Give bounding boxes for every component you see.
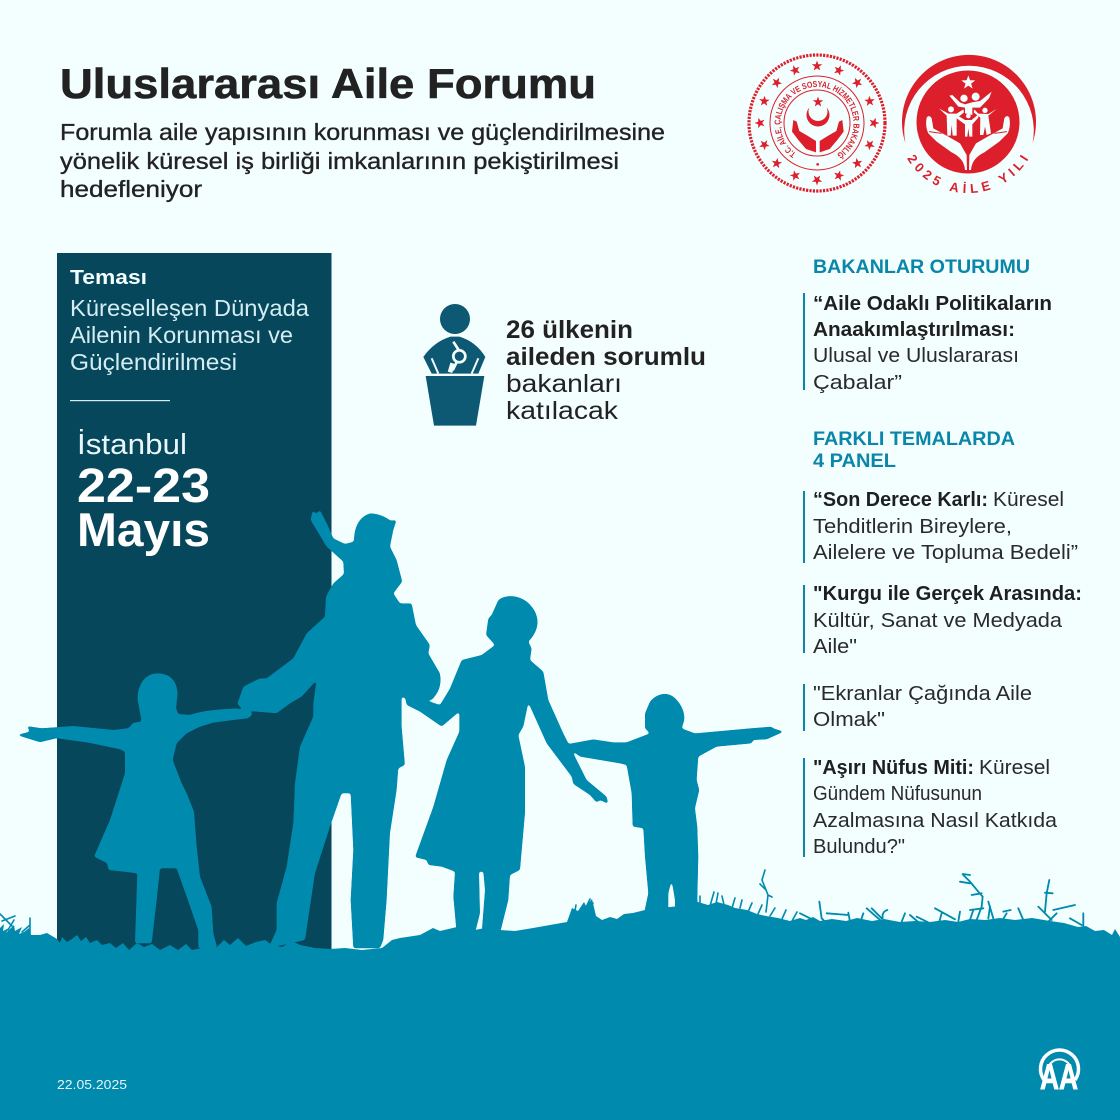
subtitle: Forumla aile yapısının korunması ve güçlendirilmesine bbox=[60, 119, 665, 145]
panel item 2: Aile" bbox=[813, 635, 857, 658]
panel item 1: Küresel bbox=[993, 488, 1064, 511]
panel item 4 bbox=[803, 756, 1058, 858]
callout: ministers attending bbox=[506, 316, 706, 425]
panel item 3: "Ekranlar Çağında Aile bbox=[813, 682, 1032, 705]
logo: 2025 family year: 2025 AİLE YILI bbox=[907, 154, 1028, 193]
heading: four panels: 4 PANEL bbox=[813, 450, 896, 472]
location: İstanbul bbox=[77, 428, 187, 461]
panel item 3 bbox=[803, 682, 1032, 731]
panel item 4: Azalmasına Nasıl Katkıda bbox=[813, 809, 1058, 832]
panel item 2: "Kurgu ile Gerçek Arasında: bbox=[813, 582, 1082, 605]
callout: ministers attending: katılacak bbox=[506, 397, 619, 425]
logo: ministry seal bbox=[747, 53, 887, 193]
panel item 4: "Aşırı Nüfus Miti: bbox=[813, 756, 974, 779]
mother bbox=[405, 596, 608, 933]
date range: 22-23 bbox=[77, 460, 210, 513]
panel item 1 bbox=[803, 488, 1078, 564]
session item: Ulusal ve Uluslararası bbox=[813, 344, 1019, 367]
session item: Anaakımlaştırılması: bbox=[813, 318, 1015, 341]
icon: minister at podium bbox=[423, 304, 485, 426]
girl bbox=[17, 673, 253, 948]
heading: ministers session: BAKANLAR OTURUMU bbox=[813, 256, 1030, 278]
date range bbox=[77, 460, 210, 556]
family silhouette: girl, father with child, mother, boy bbox=[17, 510, 784, 948]
panel item 2: Kültür, Sanat ve Medyada bbox=[813, 609, 1063, 632]
panel: theme and date bbox=[57, 253, 332, 950]
heading: four panels: FARKLI TEMALARDA bbox=[813, 428, 1015, 450]
panel item 1: “Son Derece Karlı: bbox=[813, 488, 988, 511]
subtitle: yönelik küresel iş birliği imkanlarının pekiştirilmesi bbox=[60, 148, 619, 174]
logo: 2025 family year bbox=[902, 54, 1036, 193]
logo: Anadolu Agency bbox=[1040, 1050, 1078, 1097]
panel item 1: Ailelere ve Topluma Bedeli” bbox=[813, 541, 1078, 564]
theme text: Küreselleşen Dünyada bbox=[70, 295, 309, 321]
callout: ministers attending: 26 ülkenin bbox=[506, 316, 633, 344]
panel item 1: Tehditlerin Bireylere, bbox=[813, 515, 1012, 538]
boy bbox=[568, 694, 784, 917]
panel item 4: Gündem Nüfusunun bbox=[813, 782, 982, 805]
panel heading: theme: Teması bbox=[70, 266, 147, 289]
callout: ministers attending: bakanları bbox=[506, 370, 622, 398]
theme text: Güçlendirilmesi bbox=[70, 349, 237, 375]
theme text: Ailenin Korunması ve bbox=[70, 322, 293, 348]
panel item 3: Olmak" bbox=[813, 708, 885, 731]
theme text bbox=[70, 295, 309, 375]
title: Uluslararası Aile Forumu bbox=[60, 60, 596, 107]
session item: “Aile Odaklı Politikaların bbox=[813, 292, 1052, 315]
subtitle: hedefleniyor bbox=[60, 176, 202, 202]
grass and ground bbox=[0, 870, 1120, 1120]
panel item 4: Küresel bbox=[979, 756, 1050, 779]
callout: ministers attending: aileden sorumlu bbox=[506, 343, 706, 371]
panel item 4: Bulundu?" bbox=[813, 835, 905, 858]
session item: Çabalar” bbox=[813, 371, 902, 394]
panel item 2 bbox=[803, 582, 1082, 658]
subtitle bbox=[60, 119, 665, 202]
date range: Mayıs bbox=[77, 503, 210, 556]
father with child on shoulders bbox=[237, 510, 441, 948]
logo: Anadolu Agency: AA bbox=[1040, 1058, 1078, 1097]
date stamp: 22.05.2025 bbox=[57, 1078, 127, 1092]
session item bbox=[803, 292, 1052, 394]
heading: four panels bbox=[813, 428, 1015, 472]
